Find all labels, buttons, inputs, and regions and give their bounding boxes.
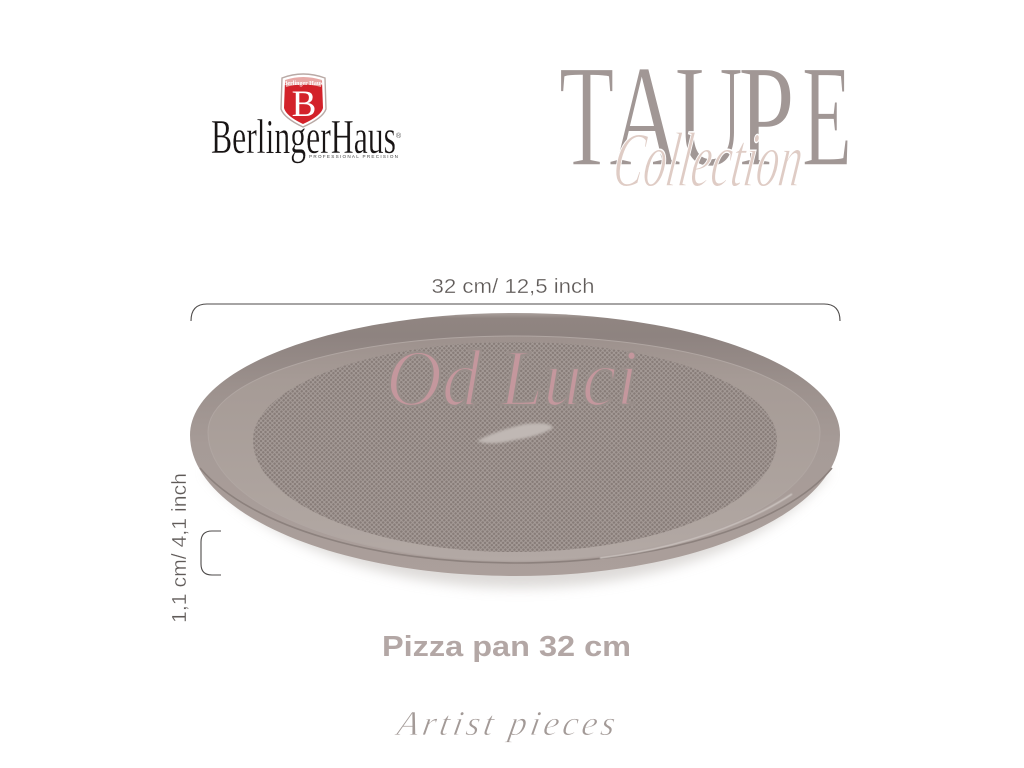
watermark: Od Luci: Od Luci — [386, 335, 638, 423]
dimension: width label: 32 cm/ 12,5 inch — [432, 276, 594, 298]
word: TAUPE: A — [609, 36, 681, 198]
lower lip highlight — [600, 494, 792, 558]
script: Collection: Collection — [609, 116, 809, 203]
word: TAUPE: T — [559, 36, 614, 197]
dimension: height bracket — [201, 531, 221, 575]
lower lip groove — [200, 468, 832, 563]
icon: red shield: Berlinger Haus — [283, 81, 323, 87]
word: TAUPE: U — [675, 35, 745, 197]
pan shadow — [205, 470, 830, 588]
icon: red shield: B — [292, 84, 316, 125]
product title: Pizza pan 32 cm — [382, 631, 631, 663]
dimension: height label: 1,1 cm/ 4,1 inch — [169, 473, 191, 623]
embossed logo — [477, 423, 553, 443]
registered mark: ® — [396, 132, 402, 140]
logo: Berlinger Haus — [211, 74, 402, 164]
pan: pizza pan — [190, 313, 840, 588]
word: TAUPE — [559, 35, 852, 198]
word: TAUPE: P — [738, 36, 795, 197]
tagline: Artist pieces: Artist pieces — [393, 704, 618, 743]
wordmark: BerlingerHaus — [211, 109, 396, 164]
pan outer rim — [190, 313, 840, 576]
tagline: PROFESSIONAL PRECISION — [309, 154, 398, 159]
logo: Taupe Collection — [559, 35, 852, 203]
inner wall — [208, 336, 820, 561]
dimension: width bracket — [191, 304, 840, 321]
icon: red shield — [281, 74, 326, 127]
mesh base — [253, 342, 777, 552]
word: TAUPE: E — [802, 35, 852, 197]
